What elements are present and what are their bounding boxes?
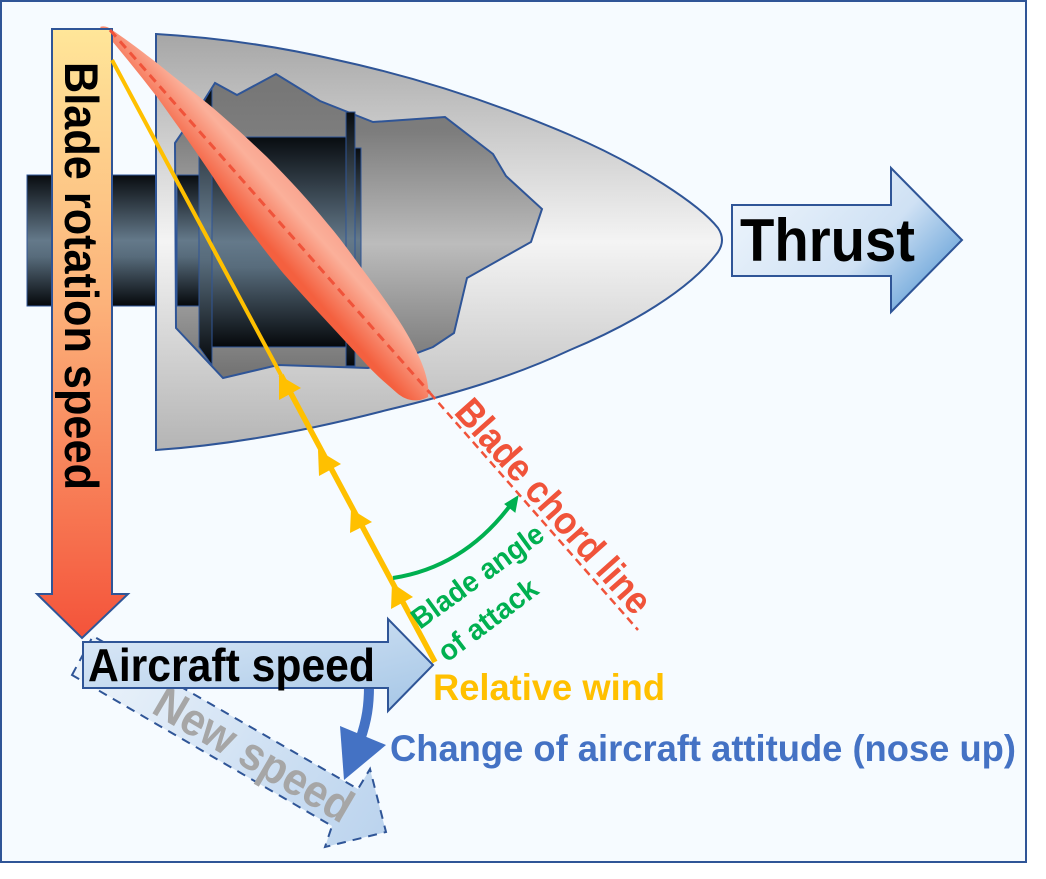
inner shaft	[177, 175, 200, 306]
aircraft nose cone	[156, 34, 722, 450]
thrust arrow	[732, 168, 962, 312]
arrowhead 1	[279, 375, 301, 400]
propeller shaft	[27, 175, 157, 306]
engine middle disc	[346, 112, 355, 366]
aircraft speed label: Aircraft speed	[88, 639, 375, 691]
arrowhead 4	[391, 583, 413, 609]
engine front disc	[199, 88, 212, 365]
arrowhead 2	[318, 450, 341, 476]
new speed dashed arrow	[72, 636, 386, 847]
attitude change curved arrow	[340, 686, 386, 780]
chord line extension	[430, 393, 638, 630]
change of attitude label: Change of aircraft attitude (nose up)	[390, 728, 1016, 769]
engine cutaway	[175, 74, 542, 378]
cutaway opening	[175, 74, 542, 378]
thrust label: Thrust	[740, 207, 915, 274]
blade angle of attack arc	[393, 496, 518, 578]
blade chord line	[110, 30, 430, 393]
aircraft speed arrow	[83, 619, 433, 711]
propeller blade	[100, 26, 428, 400]
new speed label: New speed	[145, 676, 363, 833]
blade rotation speed arrow	[37, 29, 128, 638]
engine rear ring	[355, 148, 361, 332]
engine cylinder	[212, 137, 346, 347]
arrowhead 3	[350, 509, 372, 533]
blade chord line label: Blade chord line	[446, 390, 660, 623]
blade angle of attack label: Blade angle	[405, 518, 550, 636]
blade rotation speed label: Blade rotation speed	[55, 62, 108, 490]
blade angle of attack label: of attack	[432, 572, 545, 669]
relative wind line with arrowheads	[112, 60, 435, 662]
relative wind label: Relative wind	[433, 667, 665, 708]
